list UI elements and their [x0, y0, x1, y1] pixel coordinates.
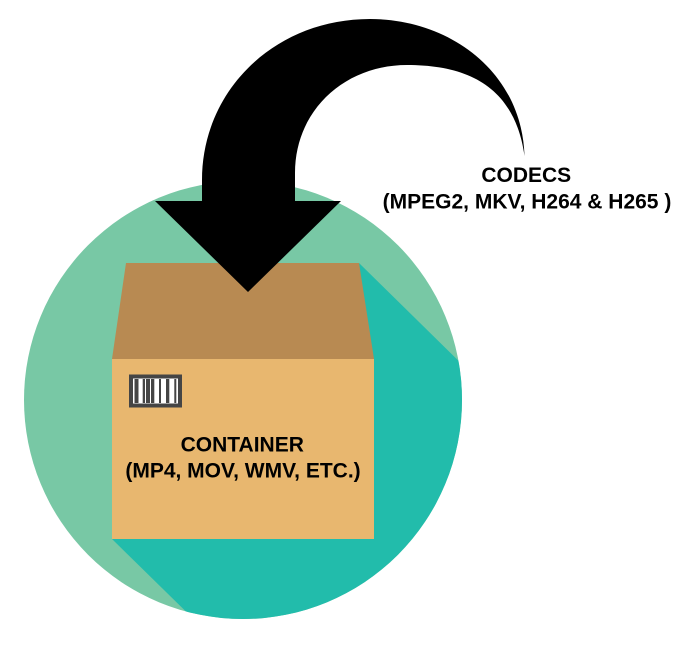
container label: (MP4, MOV, WMV, ETC.)	[125, 460, 361, 482]
container label: CONTAINER	[181, 434, 304, 456]
box	[112, 263, 374, 539]
green background circle	[24, 181, 462, 619]
teal long shadow of box	[112, 263, 462, 619]
curved arrow	[155, 19, 524, 292]
codecs label: CODECS	[481, 164, 571, 187]
box front	[112, 359, 374, 539]
icon: barcode label	[131, 376, 180, 406]
box lid	[112, 263, 374, 359]
codecs label: (MPEG2, MKV, H264 & H265 )	[383, 190, 671, 214]
